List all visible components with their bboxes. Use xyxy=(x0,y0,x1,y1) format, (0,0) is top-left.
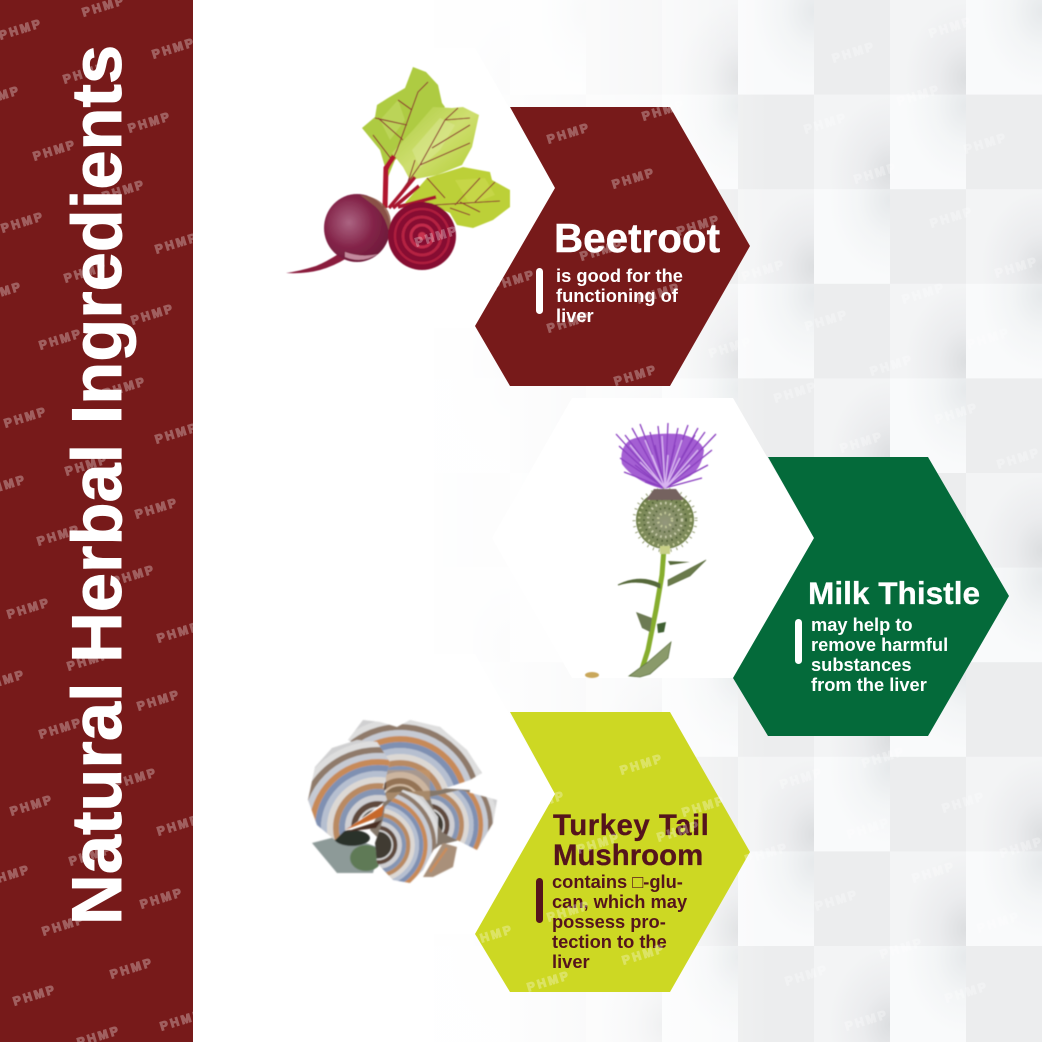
infographic canvas: PHMP xyxy=(101,374,148,400)
turkey tail description: contains □-glu- xyxy=(552,871,683,892)
infographic canvas: PHMP xyxy=(783,962,830,988)
infographic canvas: PHMP xyxy=(520,788,567,814)
turkey tail description: liver xyxy=(552,951,590,972)
infographic canvas: PHMP xyxy=(927,14,974,40)
infographic canvas: PHMP xyxy=(525,968,572,994)
infographic canvas: PHMP xyxy=(138,885,185,911)
infographic canvas: PHMP xyxy=(545,120,592,146)
beetroot illustration xyxy=(286,67,510,273)
infographic canvas: PHMP xyxy=(928,204,975,230)
beetroot hexagon xyxy=(475,107,750,386)
infographic canvas: PHMP xyxy=(37,326,84,352)
milk thistle description: from the liver xyxy=(811,674,927,695)
white hexagon: milk thistle xyxy=(492,398,814,678)
infographic canvas: PHMP xyxy=(158,1007,205,1033)
white hexagon: turkey tail xyxy=(200,654,555,934)
infographic canvas: PHMP xyxy=(910,859,957,885)
milk thistle description: substances xyxy=(811,654,912,675)
infographic canvas: PHMP xyxy=(707,334,754,360)
infographic canvas: PHMP xyxy=(943,979,990,1005)
infographic canvas: PHMP xyxy=(975,909,1022,935)
infographic canvas: PHMP xyxy=(126,109,173,135)
infographic canvas: PHMP xyxy=(468,922,515,948)
sidebar panel xyxy=(0,0,193,1042)
infographic canvas: PHMP xyxy=(413,223,460,249)
milk thistle accent bar xyxy=(795,619,802,664)
infographic canvas: PHMP xyxy=(112,765,159,791)
turkey tail heading: Mushroom xyxy=(553,839,703,872)
infographic canvas: PHMP xyxy=(838,429,885,455)
infographic canvas: PHMP xyxy=(843,1007,890,1033)
turkey tail description: possess pro- xyxy=(552,911,666,932)
beetroot description: functioning of xyxy=(556,285,679,306)
infographic canvas: PHMP xyxy=(778,765,825,791)
infographic canvas: PHMP xyxy=(575,830,622,856)
infographic canvas: PHMP xyxy=(830,39,877,65)
milk thistle hexagon xyxy=(733,457,1009,736)
infographic canvas: PHMP xyxy=(802,110,849,136)
infographic canvas: PHMP xyxy=(675,212,722,238)
infographic canvas: PHMP xyxy=(135,687,182,713)
infographic canvas: PHMP xyxy=(100,177,147,203)
infographic canvas: PHMP xyxy=(63,452,110,478)
infographic canvas: PHMP xyxy=(845,815,892,841)
infographic canvas: PHMP xyxy=(995,445,1042,471)
infographic canvas: PHMP xyxy=(110,562,157,588)
infographic canvas: PHMP xyxy=(680,793,727,819)
infographic canvas: PHMP xyxy=(65,647,112,673)
infographic canvas: PHMP xyxy=(635,280,682,306)
turkey tail description: can, which may xyxy=(552,891,688,912)
infographic canvas: PHMP xyxy=(8,792,55,818)
infographic canvas: PHMP xyxy=(878,935,925,961)
infographic canvas: PHMP xyxy=(813,887,860,913)
sidebar title: Natural Herbal Ingredients xyxy=(57,45,136,925)
infographic canvas: PHMP xyxy=(803,307,850,333)
infographic canvas: PHMP xyxy=(155,812,202,838)
infographic canvas: PHMP xyxy=(37,715,84,741)
milk thistle description: may help to xyxy=(811,614,913,635)
infographic canvas: PHMP xyxy=(640,97,687,123)
infographic canvas: PHMP xyxy=(155,619,202,645)
white hexagon: beetroot xyxy=(200,48,555,328)
infographic canvas: PHMP xyxy=(860,744,907,770)
turkey tail hexagon xyxy=(475,712,750,992)
beetroot accent bar xyxy=(536,268,543,314)
milk thistle description: remove harmful xyxy=(811,634,948,655)
infographic canvas: PHMP xyxy=(108,955,155,981)
infographic canvas: PHMP xyxy=(772,379,819,405)
turkey tail mushroom illustration xyxy=(307,720,498,884)
infographic canvas: PHMP xyxy=(868,352,915,378)
infographic canvas: PHMP xyxy=(965,325,1012,351)
beetroot heading: Beetroot xyxy=(554,215,720,261)
infographic canvas: PHMP xyxy=(61,60,108,86)
infographic canvas: PHMP xyxy=(40,912,87,938)
infographic canvas: PHMP xyxy=(62,259,109,285)
infographic canvas: PHMP xyxy=(620,941,667,967)
turkey tail card xyxy=(475,712,750,992)
infographic canvas: PHMP xyxy=(11,982,58,1008)
infographic canvas: PHMP xyxy=(545,309,592,335)
infographic canvas: PHMP xyxy=(150,35,197,61)
infographic canvas: PHMP xyxy=(31,137,78,163)
infographic canvas: PHMP xyxy=(895,82,942,108)
infographic canvas: PHMP xyxy=(490,267,537,293)
infographic canvas: PHMP xyxy=(545,898,592,924)
turkey tail accent bar xyxy=(536,878,543,923)
beetroot description: liver xyxy=(556,305,594,326)
infographic canvas: PHMP xyxy=(610,165,657,191)
infographic canvas: PHMP xyxy=(153,230,200,256)
infographic canvas: PHMP xyxy=(852,160,899,186)
turkey tail description: tection to the xyxy=(552,931,667,952)
infographic canvas: PHMP xyxy=(129,301,176,327)
infographic canvas: PHMP xyxy=(743,840,790,866)
infographic canvas: PHMP xyxy=(900,280,947,306)
infographic canvas: PHMP xyxy=(618,751,665,777)
infographic canvas: PHMP xyxy=(35,522,82,548)
milk thistle heading: Milk Thistle xyxy=(808,575,980,611)
turkey tail heading: Turkey Tail xyxy=(553,809,709,842)
milk thistle illustration xyxy=(585,423,716,678)
infographic canvas: PHMP xyxy=(993,254,1040,280)
infographic canvas: PHMP xyxy=(740,257,787,283)
infographic canvas: PHMP xyxy=(933,400,980,426)
beetroot card xyxy=(475,107,750,386)
infographic canvas: PHMP xyxy=(578,237,625,263)
infographic canvas: PHMP xyxy=(962,130,1009,156)
beetroot description: is good for the xyxy=(556,265,683,286)
infographic canvas: PHMP xyxy=(0,209,46,235)
milk thistle card xyxy=(733,457,1009,736)
infographic canvas: PHMP xyxy=(2,404,49,430)
infographic canvas: PHMP xyxy=(133,495,180,521)
infographic canvas: PHMP xyxy=(655,818,702,844)
infographic canvas: PHMP xyxy=(67,842,114,868)
infographic canvas: PHMP xyxy=(5,595,52,621)
infographic canvas: PHMP xyxy=(612,362,659,388)
infographic canvas: PHMP xyxy=(153,420,200,446)
infographic canvas: PHMP xyxy=(940,789,987,815)
